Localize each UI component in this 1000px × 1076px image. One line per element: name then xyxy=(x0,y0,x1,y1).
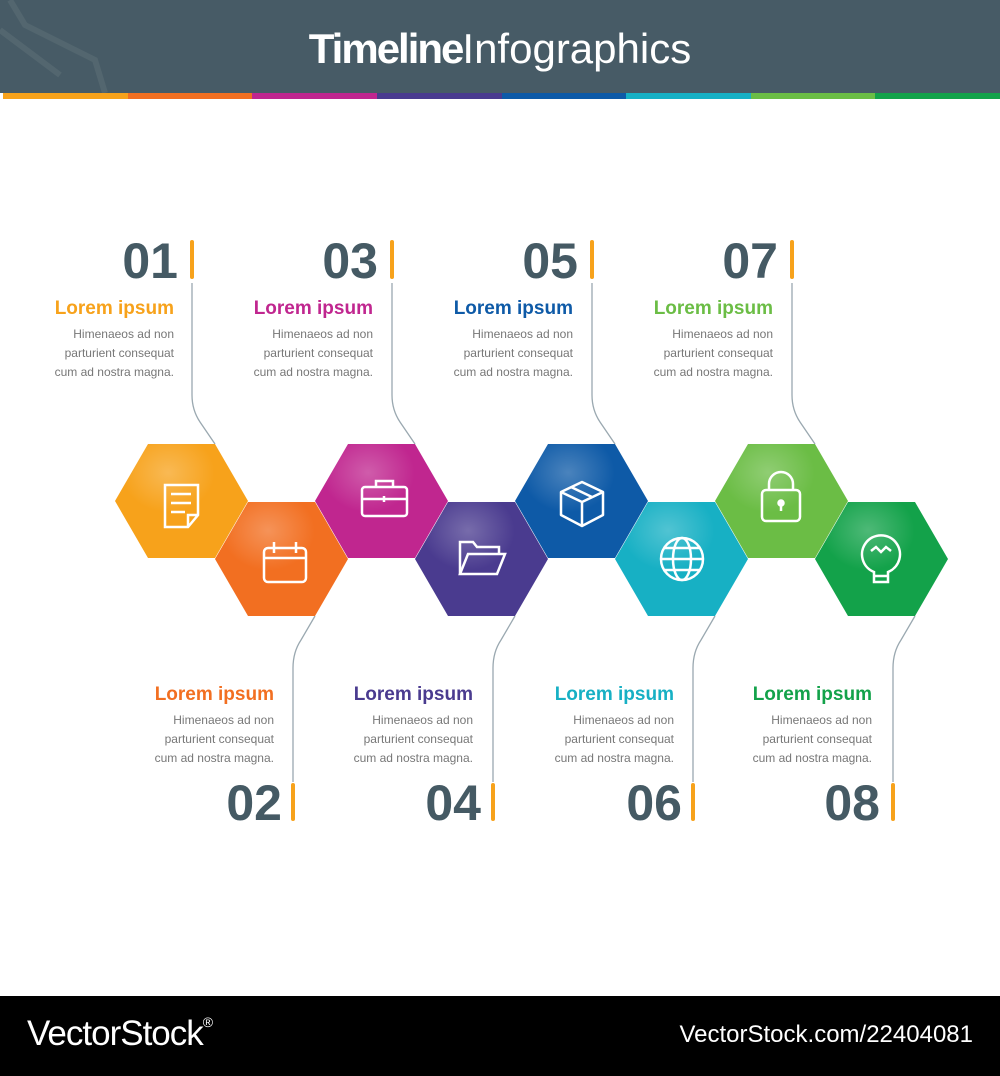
icon: lock xyxy=(762,472,800,521)
step 06 text: Himenaeos ad non xyxy=(573,713,674,727)
step 05 text: 05 xyxy=(522,233,578,289)
step 02 text xyxy=(155,684,282,831)
step 04 text: Lorem ipsum xyxy=(354,684,473,705)
step 06 text: parturient consequat xyxy=(565,732,675,746)
hexagon 4 xyxy=(415,502,548,616)
step 05 text: Lorem ipsum xyxy=(454,298,573,319)
step 02 text: Himenaeos ad non xyxy=(173,713,274,727)
icon: briefcase xyxy=(362,481,407,516)
step 01 text: 01 xyxy=(122,233,178,289)
icon: folder xyxy=(460,542,505,574)
step 03 text: 03 xyxy=(322,233,378,289)
hexagon 6 xyxy=(615,502,748,616)
step 05 text: Himenaeos ad non xyxy=(472,327,573,341)
title: TimelineInfographics xyxy=(309,25,691,72)
decorative header stroke xyxy=(0,0,108,93)
step 08 text: Lorem ipsum xyxy=(753,684,872,705)
step 03 text: parturient consequat xyxy=(264,346,374,360)
step 08 text: parturient consequat xyxy=(763,732,873,746)
step 04 text: 04 xyxy=(425,775,481,831)
step 02 text: cum ad nostra magna. xyxy=(155,751,274,765)
step 06 text: 06 xyxy=(626,775,682,831)
icon: document xyxy=(165,485,198,527)
connector lines xyxy=(192,283,915,782)
header bar xyxy=(0,0,1000,93)
step 01 text: Himenaeos ad non xyxy=(73,327,174,341)
footer bar xyxy=(0,996,1000,1076)
step 08 text: 08 xyxy=(824,775,880,831)
step 08 text: Himenaeos ad non xyxy=(771,713,872,727)
color stripe xyxy=(3,93,1000,99)
hexagon 7 xyxy=(715,444,848,558)
step 05 text: parturient consequat xyxy=(464,346,574,360)
step 08 text: cum ad nostra magna. xyxy=(753,751,872,765)
footer brand: VectorStock® xyxy=(27,1014,212,1053)
step 04 text: Himenaeos ad non xyxy=(372,713,473,727)
step 06 text: Lorem ipsum xyxy=(555,684,674,705)
step 04 text: cum ad nostra magna. xyxy=(354,751,473,765)
hexagon 8 xyxy=(815,502,948,616)
step 06 text: cum ad nostra magna. xyxy=(555,751,674,765)
step 02 text: Lorem ipsum xyxy=(155,684,274,705)
hexagon 2 xyxy=(215,502,348,616)
step 07 text: Lorem ipsum xyxy=(654,298,773,319)
icon: calendar xyxy=(264,542,306,582)
step 02 text: 02 xyxy=(226,775,282,831)
step 06 text xyxy=(555,684,682,831)
step 08 text xyxy=(753,684,880,831)
step 03 text: Himenaeos ad non xyxy=(272,327,373,341)
step 01 text xyxy=(55,233,178,379)
hexagon 5 xyxy=(515,444,648,558)
step 05 text: cum ad nostra magna. xyxy=(454,365,573,379)
step 01 text: parturient consequat xyxy=(65,346,175,360)
step 04 text xyxy=(354,684,481,831)
step 01 text: Lorem ipsum xyxy=(55,298,174,319)
step 03 text: Lorem ipsum xyxy=(254,298,373,319)
orange ticks xyxy=(192,242,893,819)
hexagon 1 xyxy=(115,444,248,558)
icon: light bulb xyxy=(862,535,900,582)
footer id: VectorStock.com/22404081 xyxy=(679,1021,973,1048)
step 07 text: parturient consequat xyxy=(664,346,774,360)
step 03 text xyxy=(254,233,378,379)
step 01 text: cum ad nostra magna. xyxy=(55,365,174,379)
step 07 text: 07 xyxy=(722,233,778,289)
hexagon 3 xyxy=(315,444,448,558)
step 07 text xyxy=(654,233,778,379)
step 03 text: cum ad nostra magna. xyxy=(254,365,373,379)
step 07 text: cum ad nostra magna. xyxy=(654,365,773,379)
step 05 text xyxy=(454,233,578,379)
step 02 text: parturient consequat xyxy=(165,732,275,746)
icon: box xyxy=(561,482,603,526)
icon: globe xyxy=(661,538,703,580)
step 07 text: Himenaeos ad non xyxy=(672,327,773,341)
step 04 text: parturient consequat xyxy=(364,732,474,746)
